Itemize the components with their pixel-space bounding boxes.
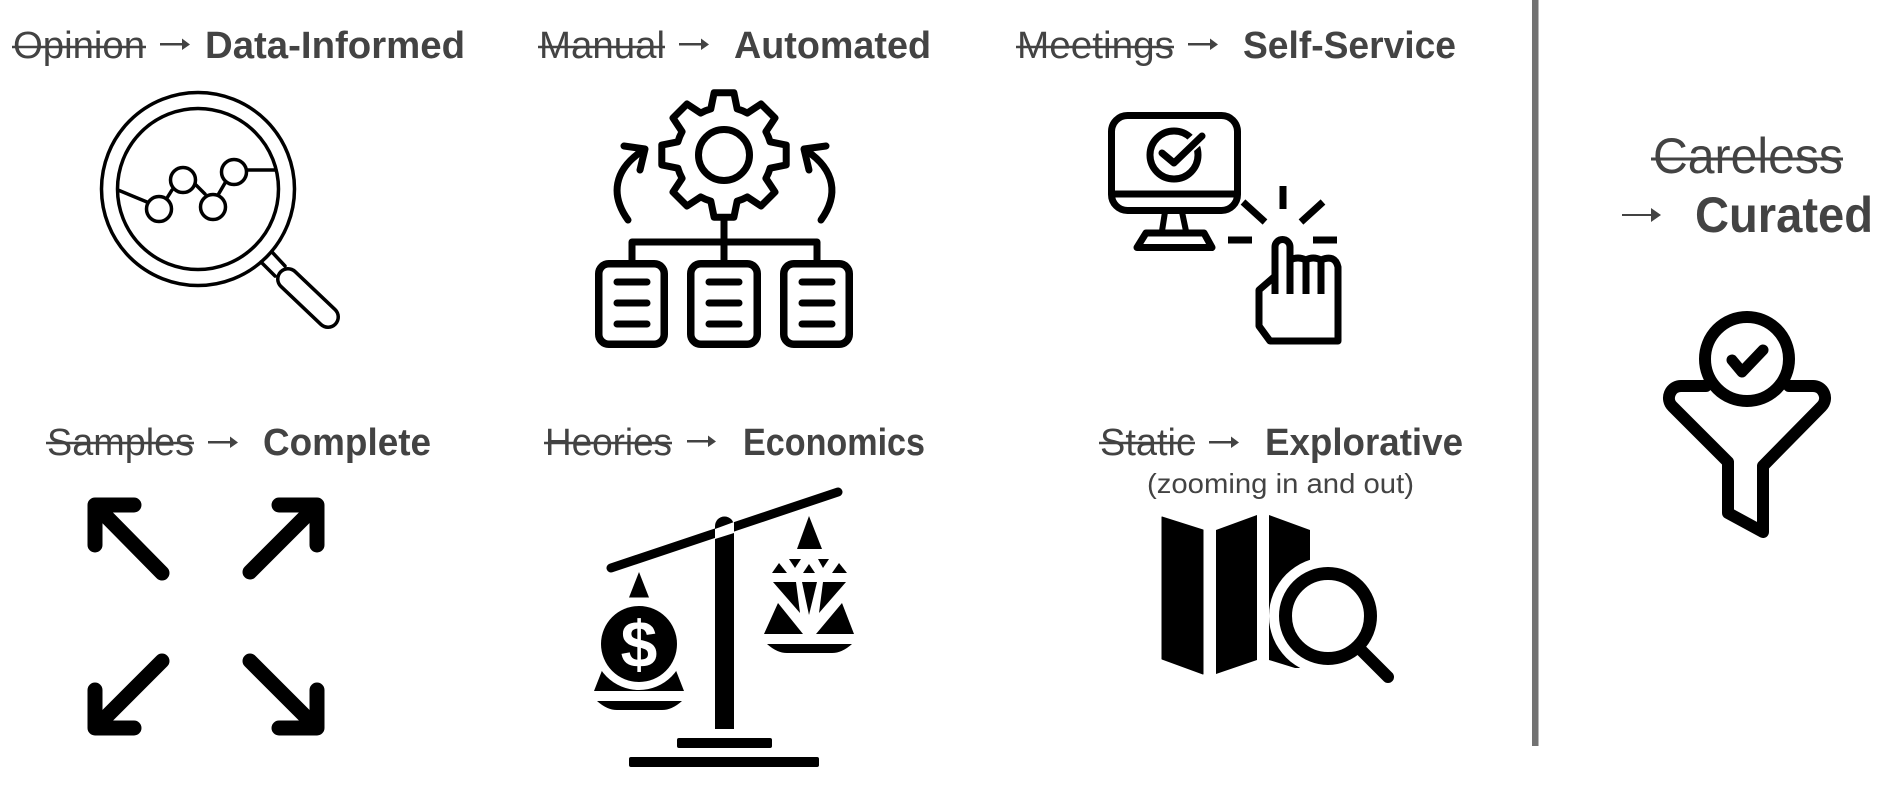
heading: samples to complete	[46, 422, 431, 464]
heading: meetings to self-service: Self-Service	[1243, 25, 1456, 67]
heading: meetings to self-service	[1016, 25, 1456, 67]
icon: monitor and clicking hand	[1112, 116, 1338, 341]
panel: data-informed	[12, 25, 465, 317]
heading: opinion to data-informed	[12, 25, 465, 67]
panel: explorative	[1099, 422, 1463, 677]
heading: theories to economics	[544, 422, 925, 464]
icon: gear with documents	[599, 93, 849, 344]
panel: self-service	[1016, 25, 1456, 341]
heading: samples to complete: Samples	[47, 422, 194, 464]
subtitle: zooming note: (zooming in and out)	[1147, 468, 1414, 499]
heading: opinion to data-informed: Opinion	[13, 25, 145, 67]
panel: complete	[46, 422, 431, 728]
icon: balance scale with money and diamond	[593, 492, 854, 767]
heading: careless to curated: Curated	[1695, 187, 1873, 243]
heading: opinion to data-informed: Data-Informed	[205, 25, 465, 67]
heading: manual to automated: Automated	[734, 25, 931, 67]
heading: samples to complete: Complete	[263, 422, 431, 464]
heading: manual to automated	[538, 25, 931, 67]
heading: static to explorative: Static	[1100, 422, 1195, 464]
icon: funnel with check	[1669, 317, 1825, 532]
panel: automated	[538, 25, 931, 344]
heading: theories to economics: Heories	[545, 422, 672, 464]
heading: careless to curated: Careless	[1653, 128, 1843, 184]
panel: economics	[544, 422, 925, 767]
icon: balance scale with money and diamond: $	[621, 607, 657, 681]
icon: magnifier over line chart	[102, 92, 328, 317]
icon: map with magnifier	[1162, 515, 1388, 677]
divider	[1532, 0, 1538, 746]
heading: theories to economics: Economics	[743, 422, 925, 464]
panel: curated	[1622, 128, 1873, 532]
heading: manual to automated: Manual	[539, 25, 665, 67]
heading: careless to curated	[1622, 128, 1873, 243]
heading: static to explorative: Explorative	[1265, 422, 1463, 464]
heading: meetings to self-service: Meetings	[1017, 25, 1174, 67]
icon: four outward arrows	[95, 505, 317, 728]
heading: static to explorative	[1099, 422, 1463, 464]
